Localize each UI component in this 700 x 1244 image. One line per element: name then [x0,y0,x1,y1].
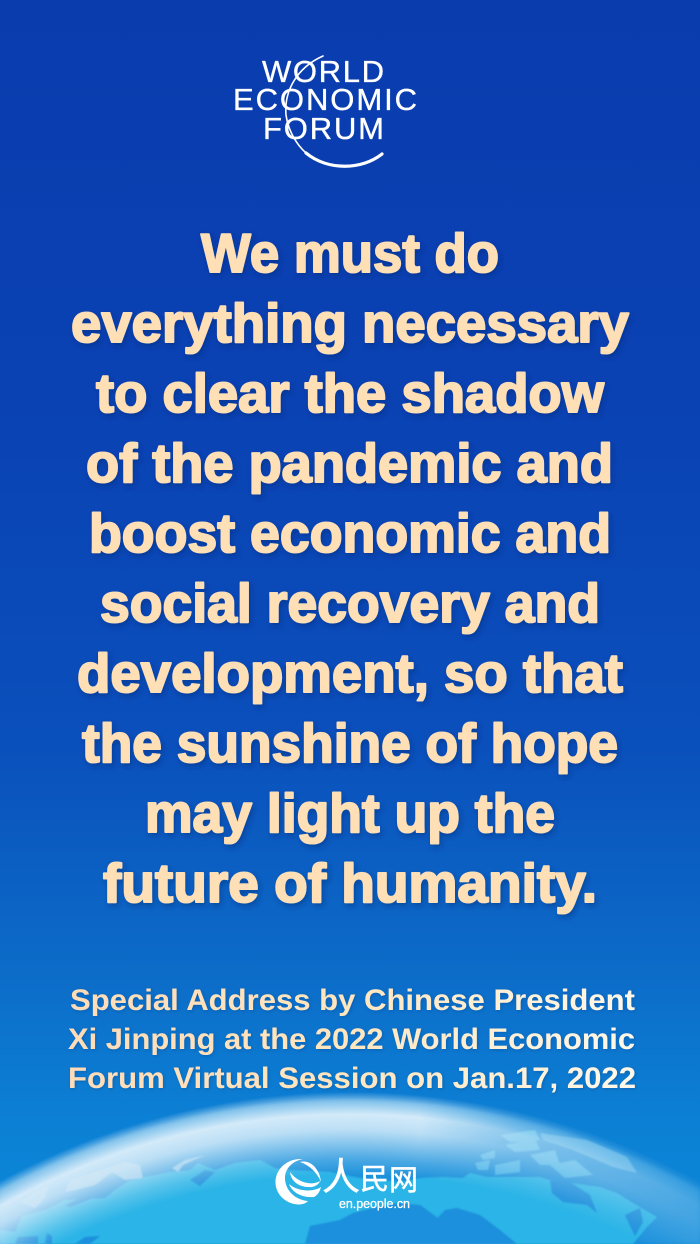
main quote: social recovery and [100,572,600,634]
light land through haze [20,1155,205,1208]
logo wordmark [233,54,417,146]
globe [0,1092,700,1244]
attribution: Xi Jinping at the 2022 World Economic [68,1023,635,1056]
main quote: development, so that [77,642,623,704]
site url: en.people.cn [339,1197,410,1211]
main quote [71,222,629,914]
icon: swirl emblem [275,1159,321,1205]
brand name [322,1157,418,1199]
main quote: everything necessary [71,292,629,354]
main quote: to clear the shadow [96,362,604,424]
attribution: Forum Virtual Session on Jan.17, 2022 [68,1062,636,1095]
brand name: 民 [360,1164,389,1196]
main quote: of the pandemic and [86,432,613,494]
main quote: the sunshine of hope [82,712,618,774]
land masses [0,1130,657,1244]
logo: World Economic Forum [233,54,417,166]
globe ocean [0,1100,700,1244]
main quote: may light up the [145,782,555,844]
atmosphere haze [0,1092,700,1244]
logo: People's Daily Online [275,1157,418,1211]
attribution [68,984,636,1095]
logo wordmark: WORLD [262,54,384,89]
brand name: 网 [389,1165,418,1197]
brand name: 人 [322,1157,360,1199]
attribution: Special Address by Chinese President [70,984,635,1017]
logo wordmark: ECONOMIC [233,82,417,117]
main quote: boost economic and [89,502,611,564]
main quote: We must do [201,222,499,284]
logo arc [286,56,382,166]
darker seas [15,1170,643,1244]
main quote: future of humanity. [103,852,597,914]
logo wordmark: FORUM [263,111,384,146]
